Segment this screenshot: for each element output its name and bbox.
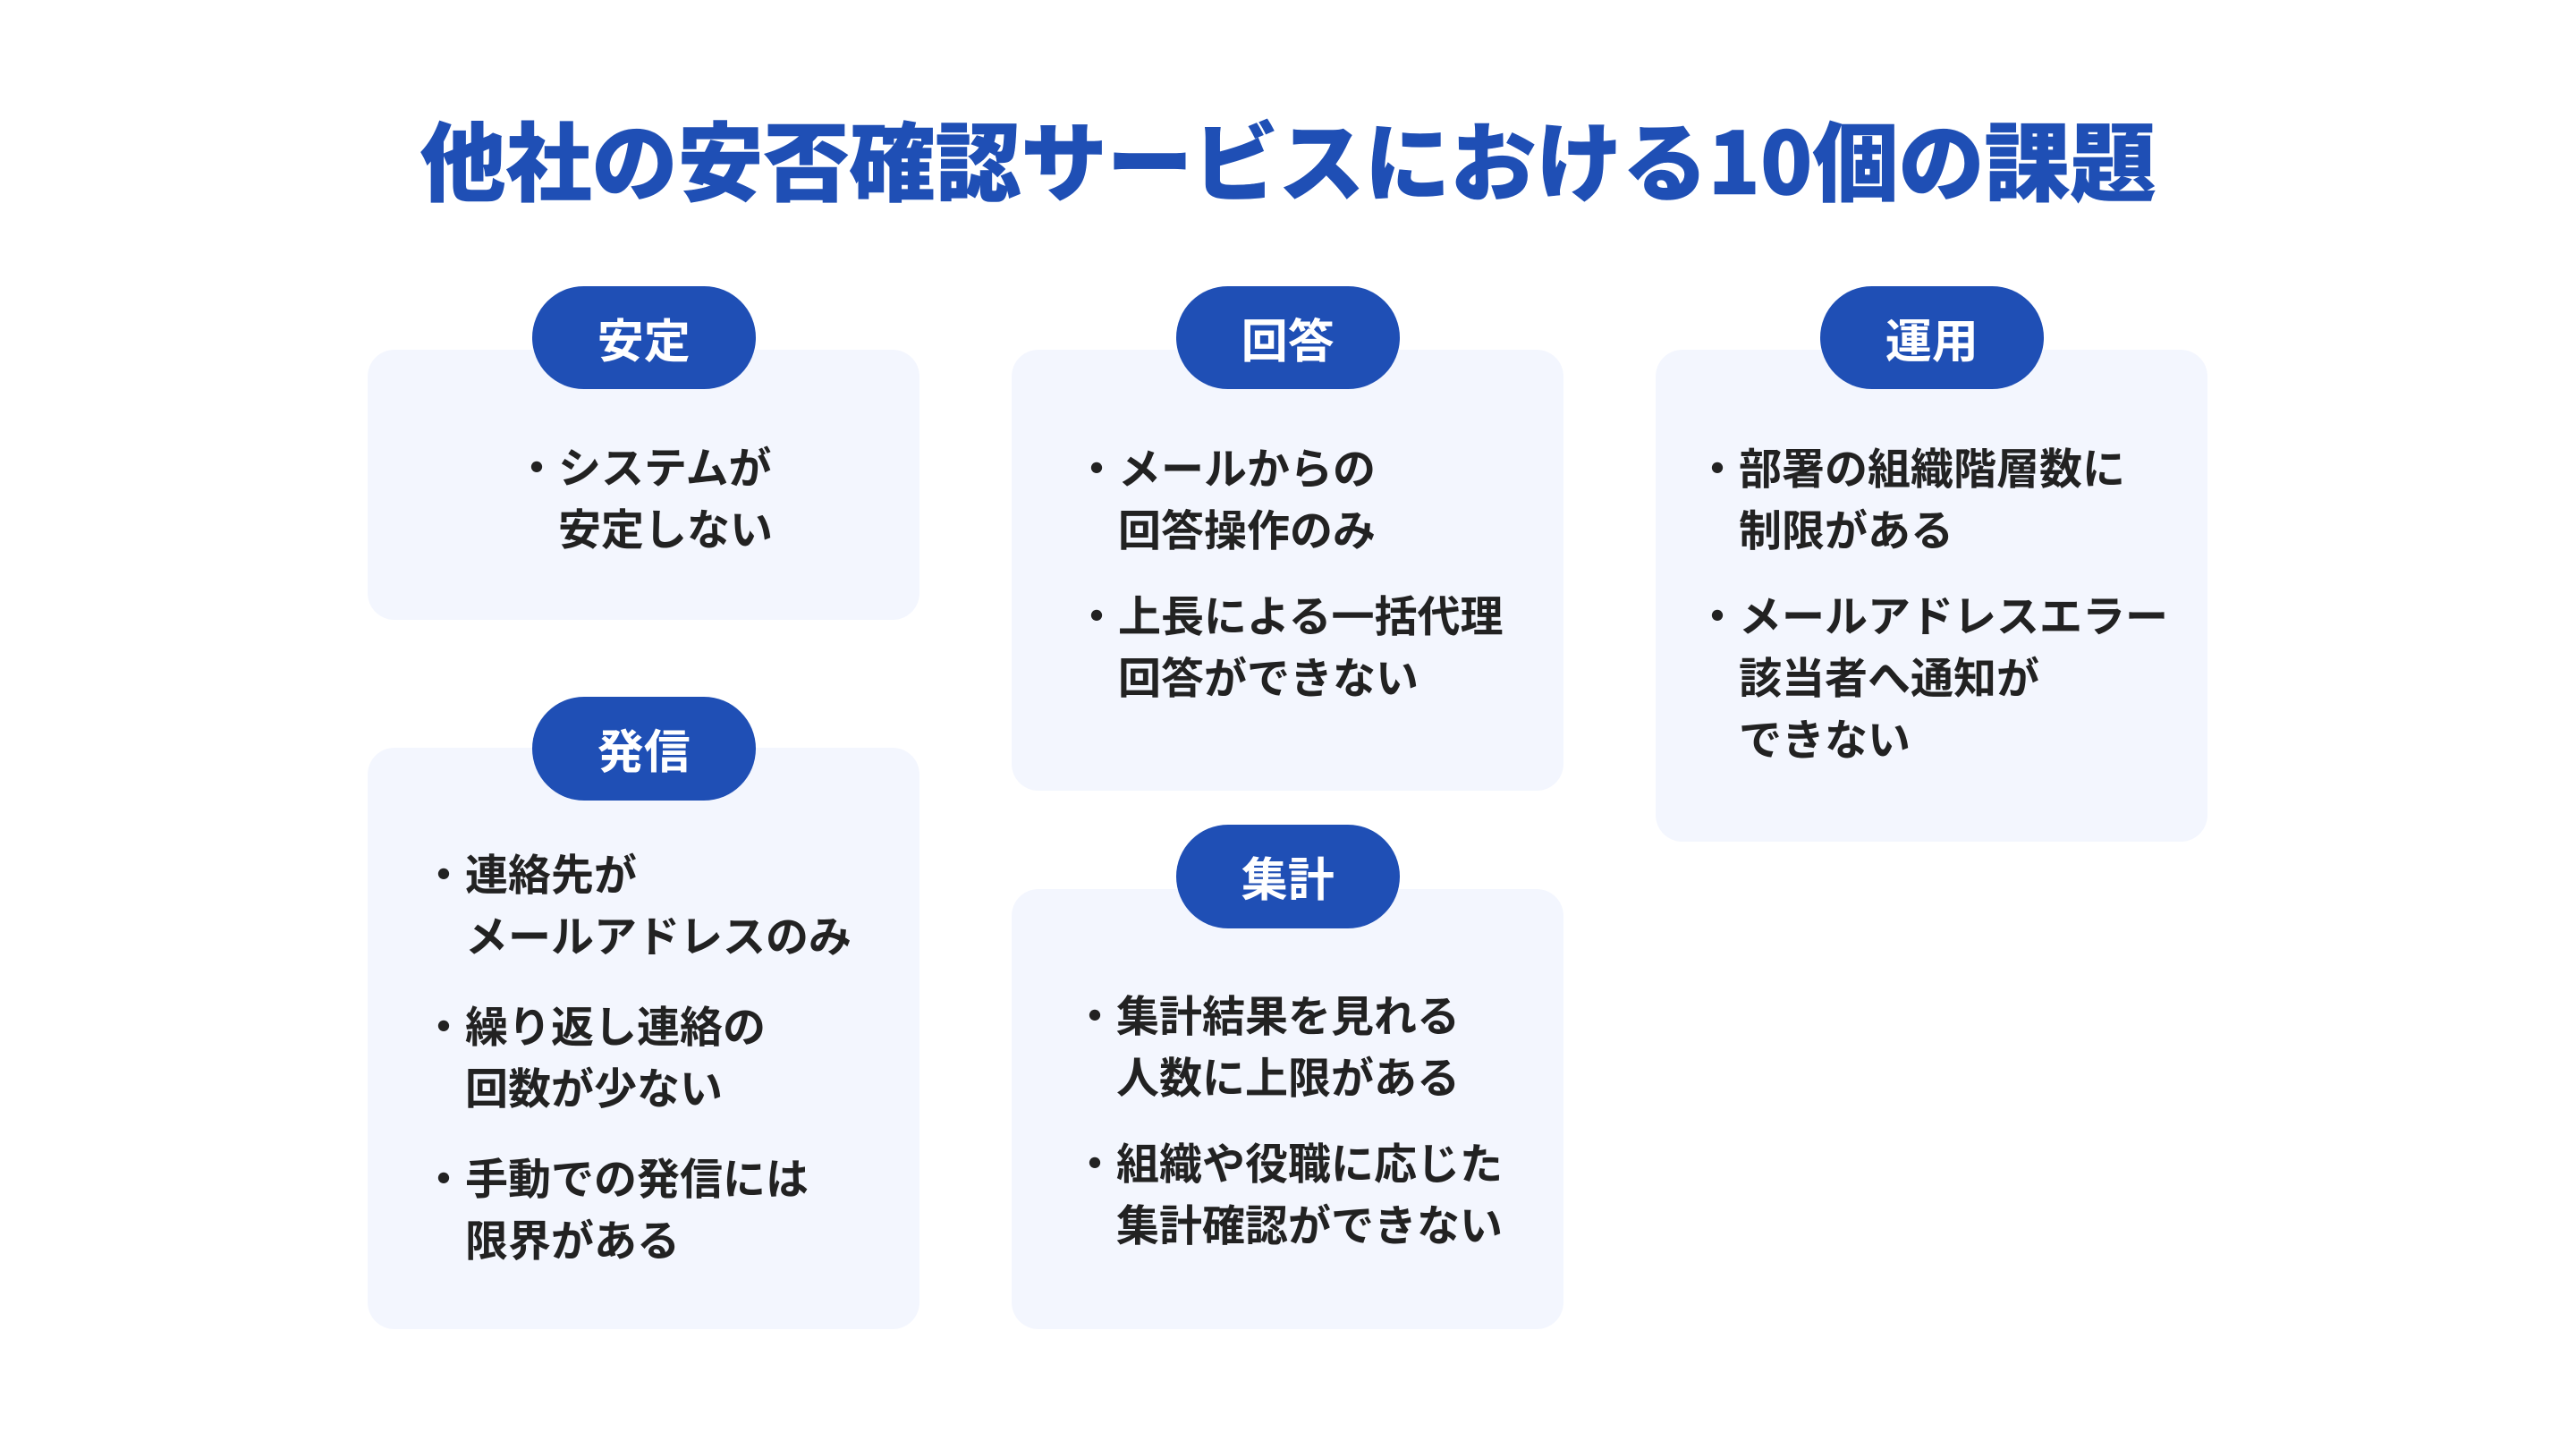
item: 手動での発信には限界がある: ・	[422, 1144, 465, 1207]
item: 集計結果を見れる人数に上限がある: 人数に上限がある	[1116, 1043, 1460, 1106]
item: システムが安定しない: 安定しない	[558, 495, 773, 557]
item: 手動での発信には限界がある: 手動での発信には	[465, 1144, 809, 1207]
item: 集計結果を見れる人数に上限がある: 集計結果を見れる	[1116, 981, 1460, 1044]
item: 部署の組織階層数に制限がある: 制限がある	[1739, 496, 1953, 558]
item: メールからの回答操作のみ: 回答操作のみ	[1118, 496, 1376, 558]
item: メールアドレスエラー該当者へ通知ができない: 該当者へ通知が	[1739, 643, 2039, 706]
pill: 発信	[532, 697, 755, 801]
item: システムが安定しない	[515, 433, 773, 557]
item: 繰り返し連絡の回数が少ない	[422, 992, 766, 1116]
item: 組織や役職に応じた集計確認ができない: ・	[1073, 1129, 1116, 1191]
item: 手動での発信には限界がある	[422, 1144, 809, 1268]
item: 部署の組織階層数に制限がある	[1696, 434, 2125, 558]
pill: 発信: 発信	[597, 715, 691, 782]
item: 連絡先がメールアドレスのみ: 連絡先が	[465, 840, 637, 902]
item: 上長による一括代理回答ができない: 上長による一括代理	[1118, 581, 1504, 644]
item: 集計結果を見れる人数に上限がある	[1073, 981, 1460, 1106]
item: 上長による一括代理回答ができない: 回答ができない	[1118, 643, 1419, 706]
item: 組織や役職に応じた集計確認ができない: 集計確認ができない	[1116, 1191, 1503, 1253]
pill: 運用	[1820, 286, 2043, 389]
pill: 運用: 運用	[1885, 304, 1979, 370]
item: メールアドレスエラー該当者へ通知ができない	[1696, 581, 2168, 767]
title: 他社の安否確認サービスにおける10個の課題	[420, 95, 2156, 219]
pill: 回答	[1176, 286, 1399, 389]
pill: 安定: 安定	[597, 304, 691, 370]
item: 手動での発信には限界がある: 限界がある	[465, 1206, 680, 1268]
panel: 集計	[1012, 825, 1563, 1329]
pill: 集計	[1176, 825, 1399, 928]
item: メールからの回答操作のみ: メールからの	[1118, 434, 1376, 496]
item: 部署の組織階層数に制限がある: ・	[1696, 434, 1739, 496]
item: 連絡先がメールアドレスのみ: メールアドレスのみ	[465, 902, 852, 964]
item: 繰り返し連絡の回数が少ない: ・	[422, 992, 465, 1055]
item: 繰り返し連絡の回数が少ない: 回数が少ない	[465, 1054, 723, 1116]
panel: 安定	[368, 286, 919, 620]
item: 繰り返し連絡の回数が少ない: 繰り返し連絡の	[465, 992, 766, 1055]
item: 上長による一括代理回答ができない	[1075, 581, 1504, 706]
item: 組織や役職に応じた集計確認ができない: 組織や役職に応じた	[1116, 1129, 1503, 1191]
pill: 安定	[532, 286, 755, 389]
pill: 回答: 回答	[1241, 304, 1335, 370]
item: 組織や役職に応じた集計確認ができない	[1073, 1129, 1503, 1253]
item: メールアドレスエラー該当者へ通知ができない: できない	[1739, 705, 1911, 767]
item: 集計結果を見れる人数に上限がある: ・	[1073, 981, 1116, 1044]
item: 上長による一括代理回答ができない: ・	[1075, 581, 1118, 644]
item: 連絡先がメールアドレスのみ: ・	[422, 840, 465, 902]
panel: 回答	[1012, 286, 1563, 791]
item: メールアドレスエラー該当者へ通知ができない: メールアドレスエラー	[1739, 581, 2168, 644]
item: メールからの回答操作のみ: ・	[1075, 434, 1118, 496]
item: メールからの回答操作のみ	[1075, 434, 1376, 558]
item: 連絡先がメールアドレスのみ	[422, 840, 852, 964]
item: メールアドレスエラー該当者へ通知ができない: ・	[1696, 581, 1739, 644]
item: システムが安定しない: ・	[515, 433, 558, 496]
panel: 運用	[1656, 286, 2207, 842]
pill: 集計: 集計	[1241, 843, 1335, 910]
item: システムが安定しない: システムが	[558, 433, 772, 496]
panel: 発信	[368, 697, 919, 1329]
item: 部署の組織階層数に制限がある: 部署の組織階層数に	[1739, 434, 2125, 496]
